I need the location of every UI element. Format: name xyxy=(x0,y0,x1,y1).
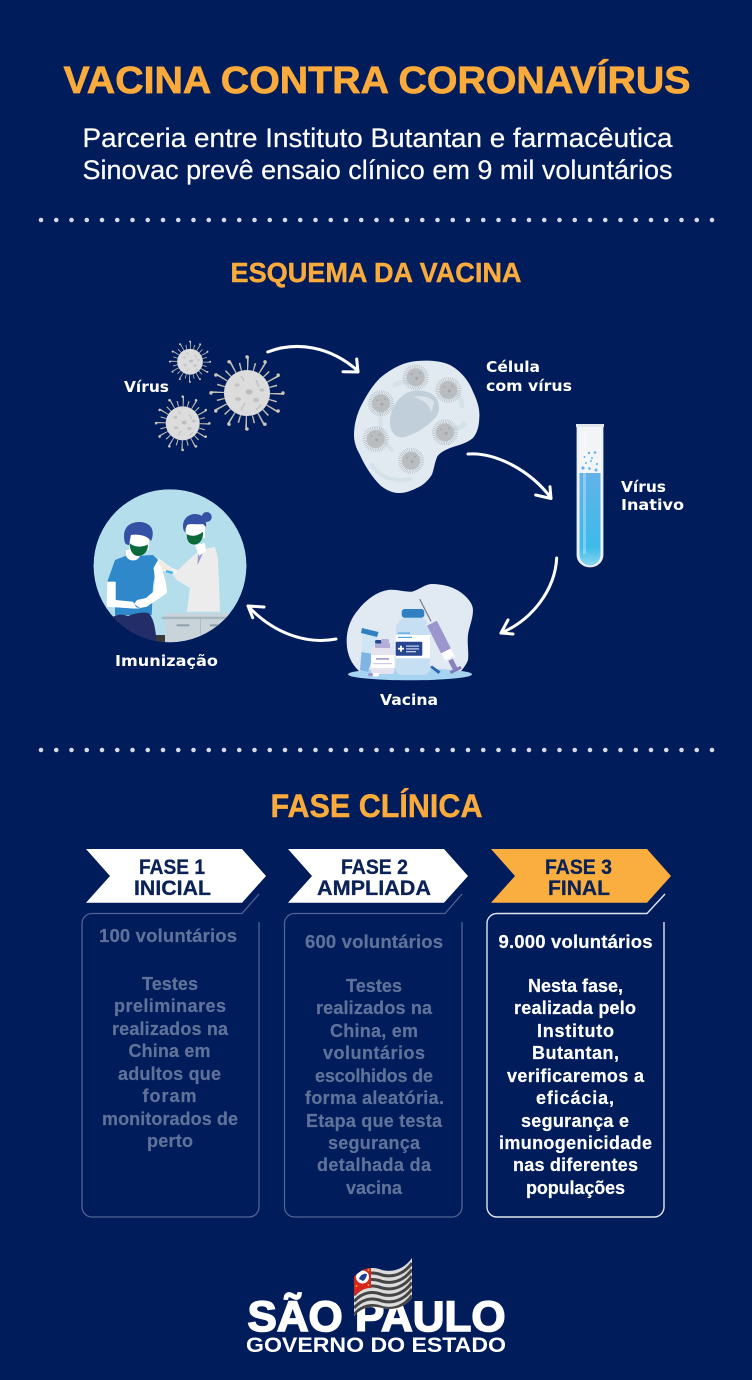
arrow: test tube to vaccine xyxy=(501,558,557,634)
text: fase 1 details: 100 voluntários xyxy=(99,925,237,946)
panel: fase 3 xyxy=(487,849,671,1217)
text: fase 3 details: imunogenicidade xyxy=(499,1133,652,1153)
text: fase 2 details: vacina xyxy=(346,1178,403,1198)
label: imunização: Imunização xyxy=(115,652,218,670)
logo: São Paulo governo do estado xyxy=(246,1256,506,1357)
logo: São Paulo governo do estado: GOVERNO DO ESTADO xyxy=(246,1334,506,1357)
text: fase 1 details xyxy=(99,925,238,1151)
text: fase 1 details: China em xyxy=(128,1041,210,1061)
text: fase 1 details: adultos que xyxy=(118,1064,221,1084)
text: fase 3 details: Butantan, xyxy=(532,1043,619,1063)
logo: São Paulo governo do estado: SÃO PAULO xyxy=(248,1293,506,1341)
text: fase 3 details: 9.000 voluntários xyxy=(498,931,652,952)
banner: fase 2 ampliada xyxy=(288,849,468,903)
icon: flag of São Paulo xyxy=(354,1258,412,1316)
text: fase 2 details: segurança xyxy=(328,1133,421,1153)
banner: fase 1 inicial: INICIAL xyxy=(134,876,211,900)
text: fase 1 details: preliminares xyxy=(114,996,226,1016)
text: fase 2 details: China, em xyxy=(330,1021,418,1041)
text: fase 3 details: verificaremos a xyxy=(507,1066,645,1086)
banner: fase 2 ampliada: AMPLIADA xyxy=(317,876,431,900)
label: vírus inativo xyxy=(621,478,684,514)
label: vírus inativo: Inativo xyxy=(621,496,684,514)
arrow: vaccine to immunization xyxy=(248,606,336,640)
text: fase 2 details xyxy=(305,931,444,1198)
label: vacina: Vacina xyxy=(380,691,438,709)
banner: fase 3 final xyxy=(491,849,671,903)
icon: test tube xyxy=(576,424,604,567)
text: fase 1 details: monitorados de xyxy=(102,1109,238,1129)
text: fase 2 details: escolhidos de xyxy=(315,1066,433,1086)
icon: cell with viruses xyxy=(354,361,479,493)
label: célula com vírus: Célula xyxy=(486,358,540,376)
text: fase 1 details: realizados na xyxy=(112,1019,229,1039)
text: fase 3 details: segurança e xyxy=(521,1111,629,1131)
text: fase 2 details: detalhada da xyxy=(317,1155,432,1175)
heading: esquema da vacina: ESQUEMA DA VACINA xyxy=(230,257,522,288)
text: fase 2 details: Testes xyxy=(346,976,402,996)
label: célula com vírus xyxy=(486,358,572,395)
label: vírus inativo: Vírus xyxy=(621,478,666,496)
text: fase 3 details: eficácia, xyxy=(536,1088,614,1108)
text: fase 1 details: foram xyxy=(142,1086,196,1106)
text: fase 3 details: populações xyxy=(526,1178,625,1198)
banner: fase 2 ampliada: FASE 2 xyxy=(341,855,408,879)
title: VACINA CONTRA CORONAVÍRUS xyxy=(64,58,690,102)
heading: fase clínica: FASE CLÍNICA xyxy=(270,788,482,824)
subtitle: Parceria entre Instituto Butantan e farmacêutica xyxy=(82,123,674,153)
text: fase 3 details: nas diferentes xyxy=(513,1155,638,1175)
text: fase 3 details: Nesta fase, xyxy=(528,976,623,996)
subtitle xyxy=(82,123,674,185)
text: fase 1 details: perto xyxy=(147,1131,193,1151)
arrow: cell to test tube xyxy=(468,454,551,498)
text: fase 2 details: Etapa que testa xyxy=(306,1111,443,1131)
banner: fase 1 inicial: FASE 1 xyxy=(139,855,205,879)
text: fase 3 details: Instituto xyxy=(537,1021,614,1041)
text: fase 2 details: voluntários xyxy=(323,1043,425,1063)
banner: fase 1 inicial xyxy=(86,849,266,903)
label: vírus: Vírus xyxy=(124,378,169,396)
icon: immunization scene xyxy=(94,489,246,645)
banner: fase 3 final: FASE 3 xyxy=(545,855,612,879)
subtitle: Sinovac prevê ensaio clínico em 9 mil voluntários xyxy=(82,155,672,185)
panel: fase 2 xyxy=(284,849,468,1217)
text: fase 1 details: Testes xyxy=(142,974,198,994)
text: fase 2 details: 600 voluntários xyxy=(305,931,443,952)
text: fase 2 details: forma aleatória. xyxy=(305,1088,444,1108)
icon: viruses xyxy=(156,342,283,450)
arrow: virus to cell xyxy=(268,346,358,372)
banner: fase 3 final: FINAL xyxy=(548,876,610,900)
label: célula com vírus: com vírus xyxy=(486,377,572,395)
text: fase 2 details: realizados na xyxy=(316,998,433,1018)
icon: vaccine bottles and syringe xyxy=(347,584,473,680)
text: fase 3 details: realizada pelo xyxy=(514,998,636,1018)
panel: fase 1 xyxy=(82,849,266,1217)
text: fase 3 details xyxy=(498,931,652,1198)
